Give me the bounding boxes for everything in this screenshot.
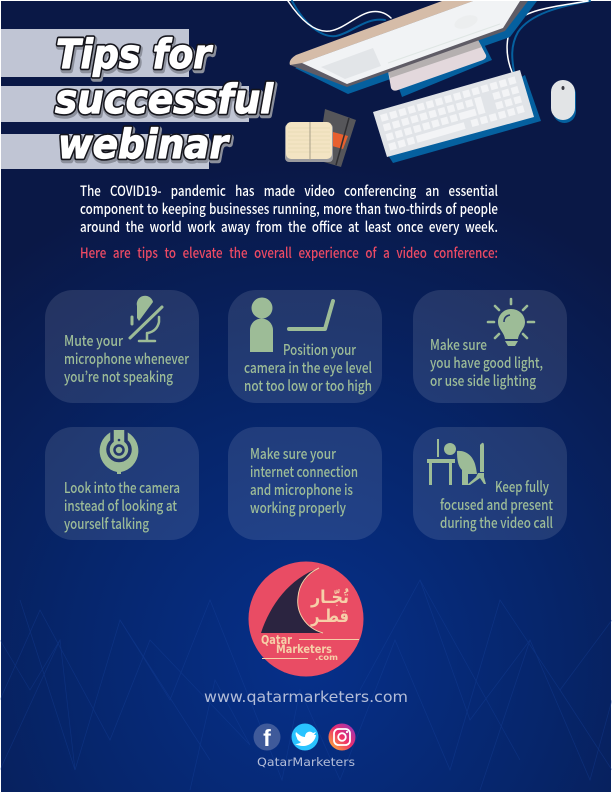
card: mute microphone: you’re not speaking	[64, 366, 173, 387]
card: camera position: Position your	[283, 339, 356, 360]
logo: Marketers	[276, 642, 332, 656]
card: internet connection: and microphone is	[250, 479, 353, 500]
monitor stand	[388, 40, 492, 97]
card: internet connection: working properly	[250, 497, 346, 518]
icon: facebook: f	[263, 725, 271, 751]
card: look into camera: Look into the camera	[64, 477, 180, 498]
logo	[248, 562, 364, 676]
intro paragraph	[80, 181, 498, 263]
title: Tips for	[56, 32, 213, 78]
icon: person and laptop	[250, 298, 333, 352]
icon: webcam	[100, 430, 138, 474]
title: successful	[55, 77, 274, 123]
title bars	[1, 29, 249, 169]
title: Tips for	[56, 32, 213, 78]
card: good light	[413, 290, 567, 403]
intro paragraph: The COVID19- pandemic has made video conferencing an essential	[80, 181, 498, 201]
background network lines	[0, 580, 612, 790]
card: look into camera	[45, 427, 199, 540]
notebooks	[285, 109, 356, 167]
intro paragraph: around the world work away from the office at least once every week.	[80, 217, 498, 237]
title: webinar	[58, 122, 230, 168]
intro paragraph: component to keeping businesses running, more than two-thirds of people	[80, 199, 498, 219]
illustration: computer desk	[285, 1, 590, 167]
icon: instagram	[328, 724, 356, 750]
logo: Qatar	[261, 633, 292, 647]
card: good light: or use side lighting	[430, 370, 537, 391]
card: good light: Make sure	[430, 334, 487, 355]
logo: تُجّـار	[310, 583, 349, 609]
mouse	[551, 80, 576, 123]
card: mute microphone: microphone whenever	[64, 348, 189, 369]
icon: muted microphone	[130, 296, 162, 341]
title: webinar	[59, 124, 231, 170]
icon: facebook	[254, 724, 280, 751]
card: stay focused: Keep fully	[495, 476, 549, 497]
card: internet connection	[228, 427, 382, 540]
card: internet connection: internet connection	[250, 461, 358, 482]
icon: person asleep at desk	[427, 439, 486, 485]
intro paragraph: Here are tips to elevate the overall experience of a video conference:	[80, 243, 498, 263]
card: good light: you have good light,	[430, 352, 543, 373]
card: look into camera: yourself talking	[64, 513, 149, 534]
card: camera position: not too low or too high	[244, 375, 372, 396]
card: mute microphone: Mute your	[64, 330, 123, 351]
card: mute microphone	[45, 290, 199, 403]
icon: light bulb	[488, 299, 534, 346]
cables	[288, 1, 590, 72]
card: look into camera: instead of looking at	[64, 495, 177, 516]
card: stay focused: focused and present	[440, 494, 553, 515]
logo: قطـر	[310, 602, 349, 628]
title: successful	[56, 79, 275, 125]
card: internet connection: Make sure your	[250, 443, 336, 464]
title: webinar	[58, 122, 230, 168]
title	[55, 32, 275, 170]
website url: www.qatarmarketers.com	[204, 688, 408, 706]
icon: twitter	[292, 724, 318, 750]
card: camera position: camera in the eye level	[244, 357, 372, 378]
logo: .com	[315, 653, 338, 662]
monitor	[290, 1, 528, 87]
monitor shadow	[295, 1, 537, 94]
title: successful	[55, 77, 274, 123]
card: stay focused	[413, 427, 567, 540]
card: camera position	[228, 290, 382, 403]
title: Tips for	[57, 34, 214, 80]
social handle: QatarMarketers	[257, 755, 355, 769]
keyboard	[373, 70, 541, 163]
card: stay focused: during the video call	[440, 512, 553, 533]
